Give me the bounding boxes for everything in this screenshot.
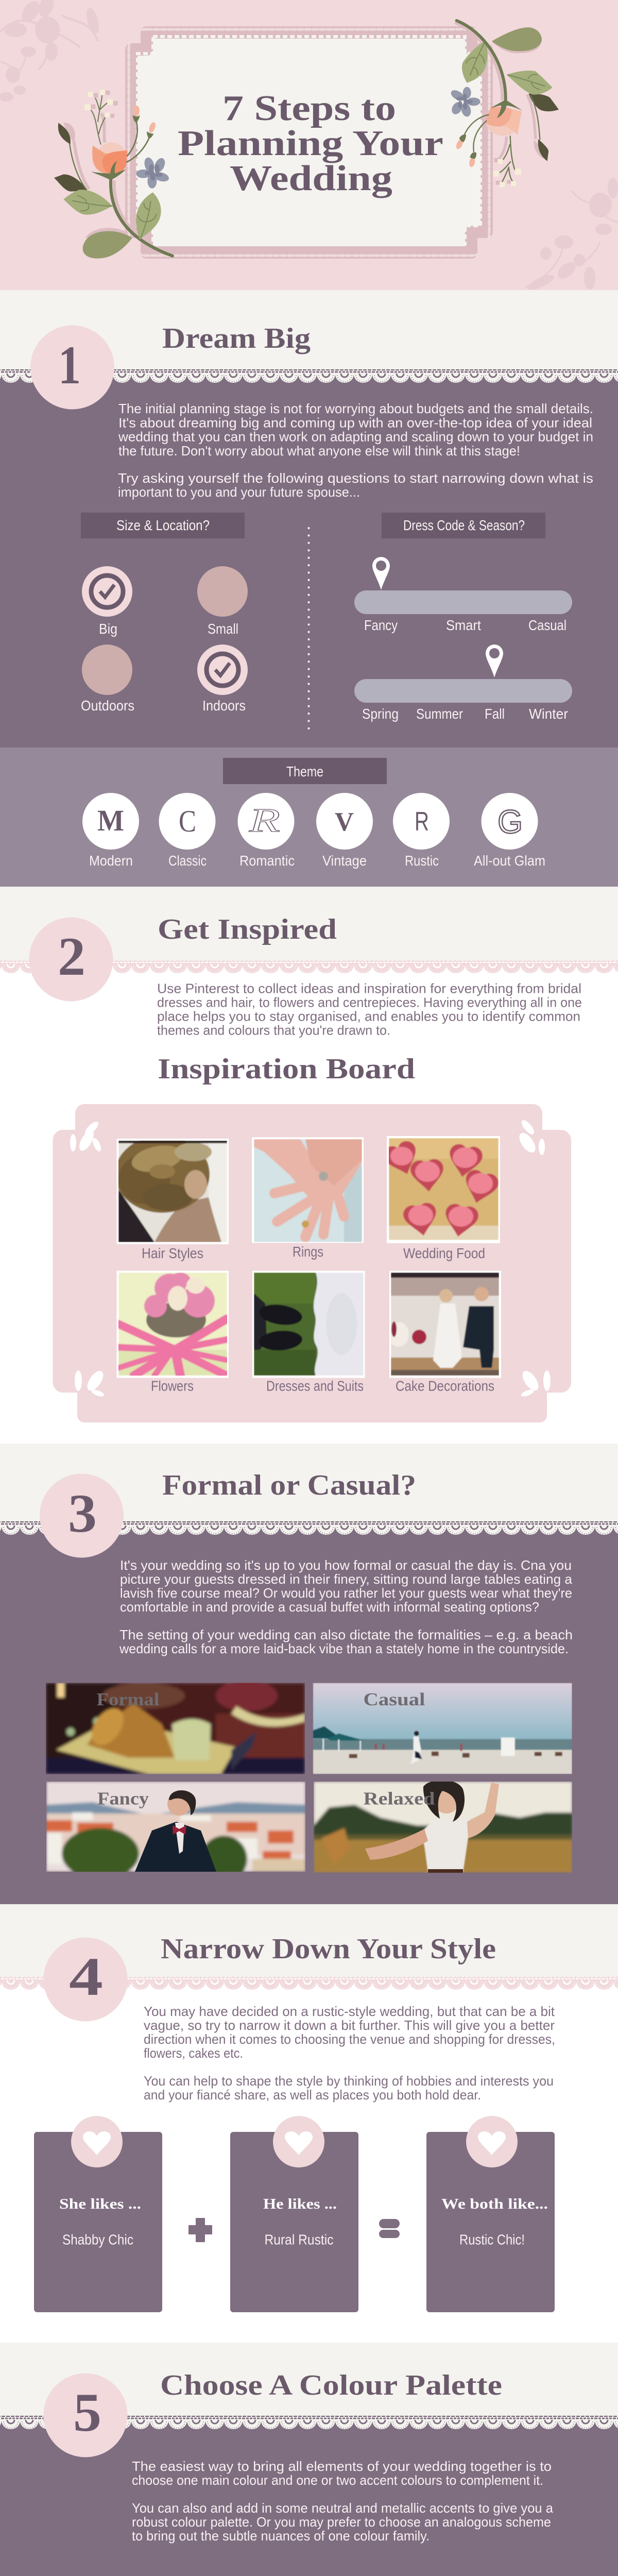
heading box: theme: [223, 758, 387, 784]
slider: dress code: Fancy: [364, 617, 398, 633]
panel: inspiration board: [53, 1104, 571, 1422]
title: Wedding: [230, 159, 392, 198]
body text: dream big: [118, 401, 593, 500]
body text: formal or casual: [119, 1557, 573, 1656]
card: we both like: Rustic Chic!: [459, 2232, 525, 2247]
photo: relaxed: Relaxed: [364, 1789, 435, 1808]
heading: Dream Big: Dream Big: [162, 323, 311, 354]
body text: narrow down: vague, so try to narrow it down a bit further. This will give you a better: [144, 2018, 555, 2033]
theme: modern: Modern: [89, 853, 133, 869]
body text: narrow down: and your fiancé share, as well as places you both hold dear.: [144, 2087, 481, 2103]
theme: vintage: Vintage: [322, 853, 367, 869]
icon: leaf sprig top left: [70, 1120, 102, 1153]
photo: cake decorations: [388, 1270, 501, 1394]
slider: season: Spring: [362, 706, 399, 722]
heading box: size and location: [81, 513, 245, 538]
heading: Choose A Colour Palette: Choose A Colour Palette: [160, 2369, 502, 2401]
photo: relaxed: [314, 1780, 572, 1873]
heading: Get Inspired: Get Inspired: [158, 913, 337, 945]
step number 4: [43, 1937, 128, 2022]
photo: fancy: [46, 1782, 305, 1882]
body text: dream big: the future. Don't worry about what anyone else will think at this stage!: [118, 443, 520, 459]
step number 5: 5: [73, 2382, 101, 2443]
icon: leaf sprig bottom right: [519, 1368, 551, 1398]
heading box: dress code and season: Dress Code & Season?: [403, 517, 525, 533]
slider: season: Summer: [416, 706, 463, 722]
slider: dress code: Smart: [446, 617, 481, 633]
photo: formal: Formal: [97, 1689, 160, 1709]
body text: formal or casual: wedding calls for a more laid-back vibe than a stately home in the countryside.: [119, 1641, 569, 1656]
photo: wedding food: [381, 1136, 501, 1261]
theme: rustic: Rustic: [405, 853, 439, 869]
theme: all-out glam: All-out Glam: [474, 853, 545, 869]
option: outdoors: [81, 645, 134, 714]
photo: wedding food: Wedding Food: [403, 1245, 485, 1261]
photo: cake decorations: Cake Decorations: [396, 1378, 494, 1394]
heading box: size and location: Size & Location?: [116, 517, 210, 533]
option: big (checked): Big: [99, 621, 117, 637]
heading box: dress code and season: [382, 513, 545, 538]
header panel: [0, 0, 618, 293]
theme: vintage: V: [335, 807, 354, 837]
heading box: theme: Theme: [286, 764, 323, 779]
body text: get inspired: Use Pinterest to collect ideas and inspiration for everything from bridal: [157, 981, 581, 996]
slider: season: Fall: [485, 706, 505, 722]
card: she likes: [34, 2116, 162, 2312]
body text: formal or casual: picture your guests dressed in their finery, sitting round large tables eating a: [120, 1571, 573, 1587]
section 4: Narrow Down Your Style: [0, 1904, 618, 2312]
body text: colour palette: The easiest way to bring all elements of your wedding together is to: [132, 2459, 552, 2474]
step number 4: 4: [69, 1946, 103, 2007]
icon: equals sign: [379, 2219, 400, 2238]
title: Planning Your: [178, 124, 443, 163]
option: indoors (checked): [197, 645, 248, 714]
body text: colour palette: choose one main colour and one or two accent colours to complement it.: [132, 2472, 543, 2488]
theme: vintage: [316, 793, 373, 869]
card: he likes: Rural Rustic: [265, 2232, 334, 2247]
photo: dresses and suits: [252, 1270, 365, 1394]
body text: narrow down: You can help to shape the style by thinking of hobbies and interests you: [144, 2073, 554, 2089]
icon: slider pin fall: [486, 645, 503, 677]
photo: hair styles: Hair Styles: [142, 1245, 203, 1261]
card: she likes: Shabby Chic: [62, 2232, 133, 2247]
body text: narrow down: direction when it comes to choosing the venue and shopping for dresses,: [144, 2031, 555, 2047]
body text: colour palette: You can also and add in some neutral and metallic accents to give you a: [132, 2500, 554, 2516]
body text: formal or casual: The setting of your wedding can also dictate the formalities – e.g. a beach: [119, 1627, 573, 1642]
body text: get inspired: place helps you to stay organised, and enables you to identify common: [157, 1009, 580, 1024]
slider: season: [354, 645, 572, 722]
section 2: Get Inspired: [0, 887, 618, 1422]
theme: romantic: Romantic: [239, 853, 295, 869]
icon: leaf sprig bottom left: [75, 1368, 107, 1398]
theme: all-out glam: G: [497, 803, 523, 840]
body text: dream big: wedding that you can then work on adapting and scaling down to your budget in: [118, 429, 593, 444]
photo: rings: [252, 1138, 364, 1260]
panel: theme: [0, 748, 618, 887]
body text: dream big: The initial planning stage is not for worrying about budgets and the small details.: [118, 401, 593, 416]
icon: slider pin fancy: [372, 557, 390, 590]
step number 3: [40, 1473, 124, 1558]
step number 1: [30, 326, 114, 409]
theme: classic: C: [179, 804, 196, 838]
theme: romantic: R: [249, 802, 280, 839]
lace frame: [129, 29, 489, 256]
option: outdoors: Outdoors: [81, 698, 134, 714]
photo: rings: Rings: [293, 1244, 323, 1260]
photo: dresses and suits: Dresses and Suits: [266, 1378, 364, 1394]
theme: classic: [159, 793, 215, 869]
theme: modern: [82, 793, 139, 869]
photo: flowers: [116, 1270, 229, 1394]
body text: colour palette: robust colour palette. Or you may prefer to choose an analogous scheme: [132, 2514, 551, 2530]
option: small: Small: [208, 621, 238, 637]
icon: plus sign: [189, 2218, 212, 2242]
section 5: Choose A Colour Palette: [0, 2343, 618, 2576]
body text: dream big: important to you and your future spouse...: [118, 484, 360, 500]
step number 2: [29, 917, 113, 1002]
body text: formal or casual: lavish five course meal? Or would you rather let your guests wear what they're: [120, 1585, 572, 1601]
flower: right bouquet: [449, 21, 559, 187]
theme: all-out glam: [474, 793, 545, 869]
body text: dream big: Try asking yourself the following questions to start narrowing down what is: [118, 470, 593, 486]
photo: flowers: Flowers: [151, 1378, 194, 1394]
body text: narrow down: You may have decided on a rustic-style wedding, but that can be a bit: [144, 2004, 555, 2019]
body text: get inspired: [157, 981, 582, 1038]
heading: Inspiration Board: Inspiration Board: [158, 1053, 415, 1085]
faint floral decoration: top left: [0, 0, 101, 101]
theme: rustic: [393, 793, 450, 869]
theme: modern: M: [97, 804, 124, 837]
step number 2: 2: [58, 926, 85, 987]
flower: left bouquet: [54, 90, 173, 259]
option: indoors (checked): Indoors: [202, 698, 246, 714]
slider: season: Winter: [529, 706, 568, 722]
body text: narrow down: flowers, cakes etc.: [144, 2045, 243, 2061]
photo: casual: Casual: [364, 1689, 425, 1709]
body text: colour palette: [132, 2459, 554, 2544]
card: she likes: She likes ...: [59, 2196, 141, 2212]
body text: get inspired: dresses and hair, to flowers and centrepieces. Having everything all in one: [157, 994, 582, 1010]
title: [178, 89, 443, 198]
body text: colour palette: to bring out the subtle nuances of one colour family.: [132, 2528, 430, 2544]
title: 7 Steps to: [222, 89, 396, 128]
section 3: Formal or Casual: [0, 1444, 618, 1904]
card: he likes: [230, 2116, 358, 2312]
photo: hair styles: [115, 1136, 229, 1261]
card: we both like: [426, 2116, 555, 2312]
step number 3: 3: [68, 1483, 97, 1544]
icon: leaf sprig top right: [516, 1118, 545, 1155]
step number 5: [43, 2373, 128, 2458]
body text: dream big: It's about dreaming big and coming up with an over-the-top idea of your ideal: [118, 415, 592, 431]
photo: formal: [46, 1681, 305, 1774]
photo: fancy: Fancy: [97, 1789, 149, 1808]
option: big (checked): [82, 566, 132, 637]
section 1: Dream Big: [0, 290, 618, 748]
step number 1: 1: [58, 335, 81, 395]
body text: formal or casual: It's your wedding so it's up to you how formal or casual the day is. Cna you: [120, 1557, 572, 1573]
photo: casual: [313, 1683, 572, 1774]
body text: formal or casual: comfortable in and provide a casual buffet with informal seating options?: [120, 1599, 539, 1615]
option: small: [197, 566, 248, 637]
card: we both like: We both like...: [441, 2196, 548, 2212]
faint floral decoration: bottom right: [525, 178, 618, 293]
heading: Narrow Down Your Style: Narrow Down Your Style: [161, 1933, 496, 1965]
body text: narrow down: [144, 2004, 555, 2103]
slider: dress code: [354, 557, 572, 633]
slider: dress code: Casual: [528, 617, 566, 633]
card: he likes: He likes ...: [263, 2196, 337, 2212]
body text: get inspired: themes and colours that you're drawn to.: [157, 1022, 390, 1038]
theme: rustic: R: [415, 807, 429, 837]
theme: classic: Classic: [168, 853, 207, 869]
theme: romantic: [238, 793, 295, 869]
heading: Formal or Casual?: Formal or Casual?: [162, 1469, 416, 1501]
